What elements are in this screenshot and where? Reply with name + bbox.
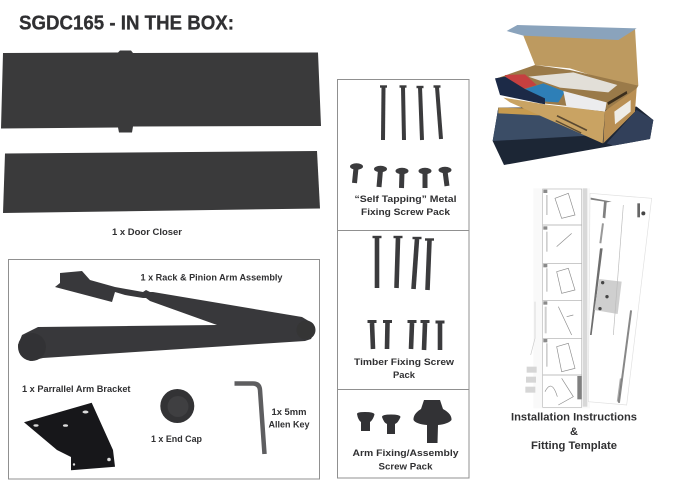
door closer [1, 50, 321, 237]
bracket label: 1 x Parrallel Arm Bracket [22, 384, 130, 394]
allen key [234, 384, 264, 454]
instruction sheet [525, 188, 590, 408]
installation label: & [570, 426, 578, 438]
box lid flap [507, 25, 637, 40]
timber label: Pack [393, 370, 416, 381]
panel: arm assembly and accessories [8, 260, 320, 479]
allen key label [268, 407, 310, 430]
arm assembly label: 1 x Rack & Pinion Arm Assembly [140, 272, 282, 282]
instruction sheets [525, 188, 652, 408]
self tapping long screws [380, 86, 441, 140]
box lid inside [523, 28, 638, 86]
installation label: Fitting Template [531, 440, 617, 452]
red packet [505, 74, 537, 89]
fitting template [588, 193, 652, 405]
title: SGDC165 - IN THE BOX: [19, 12, 234, 34]
end cap label: 1 x End Cap [151, 434, 202, 444]
door closer body [1, 50, 321, 132]
product box photo [493, 25, 653, 165]
box print [555, 115, 587, 134]
panel: screw packs [337, 80, 469, 478]
timber label [354, 357, 455, 381]
arm fixing screws [357, 400, 452, 443]
door closer cover [3, 151, 320, 213]
box end [603, 88, 637, 143]
timber short screws [368, 322, 444, 350]
blue packet [525, 83, 565, 102]
arm fixing label: Arm Fixing/Assembly [352, 448, 459, 459]
self tapping short screws [350, 163, 452, 188]
box interior [497, 65, 638, 110]
timber long screws [372, 237, 434, 290]
arm fixing label [352, 448, 459, 472]
white bag [563, 91, 607, 112]
door closer label: 1 x Door Closer [112, 227, 183, 237]
box side dark [495, 77, 545, 104]
white packets [528, 72, 617, 92]
arm assembly [18, 271, 316, 361]
box front [503, 98, 605, 143]
parallel arm bracket [24, 403, 115, 470]
lower box [493, 107, 653, 165]
self tapping label [354, 194, 456, 218]
end cap [160, 389, 194, 423]
installation label: Installation Instructions [511, 412, 637, 424]
installation label [511, 412, 637, 452]
self tapping label: “Self Tapping” Metal [354, 194, 456, 205]
self tapping label: Fixing Screw Pack [361, 207, 451, 218]
allen key label: 1x 5mm [272, 407, 306, 417]
allen key label: Allen Key [268, 420, 310, 430]
timber label: Timber Fixing Screw [354, 357, 455, 368]
arm fixing label: Screw Pack [378, 462, 433, 472]
